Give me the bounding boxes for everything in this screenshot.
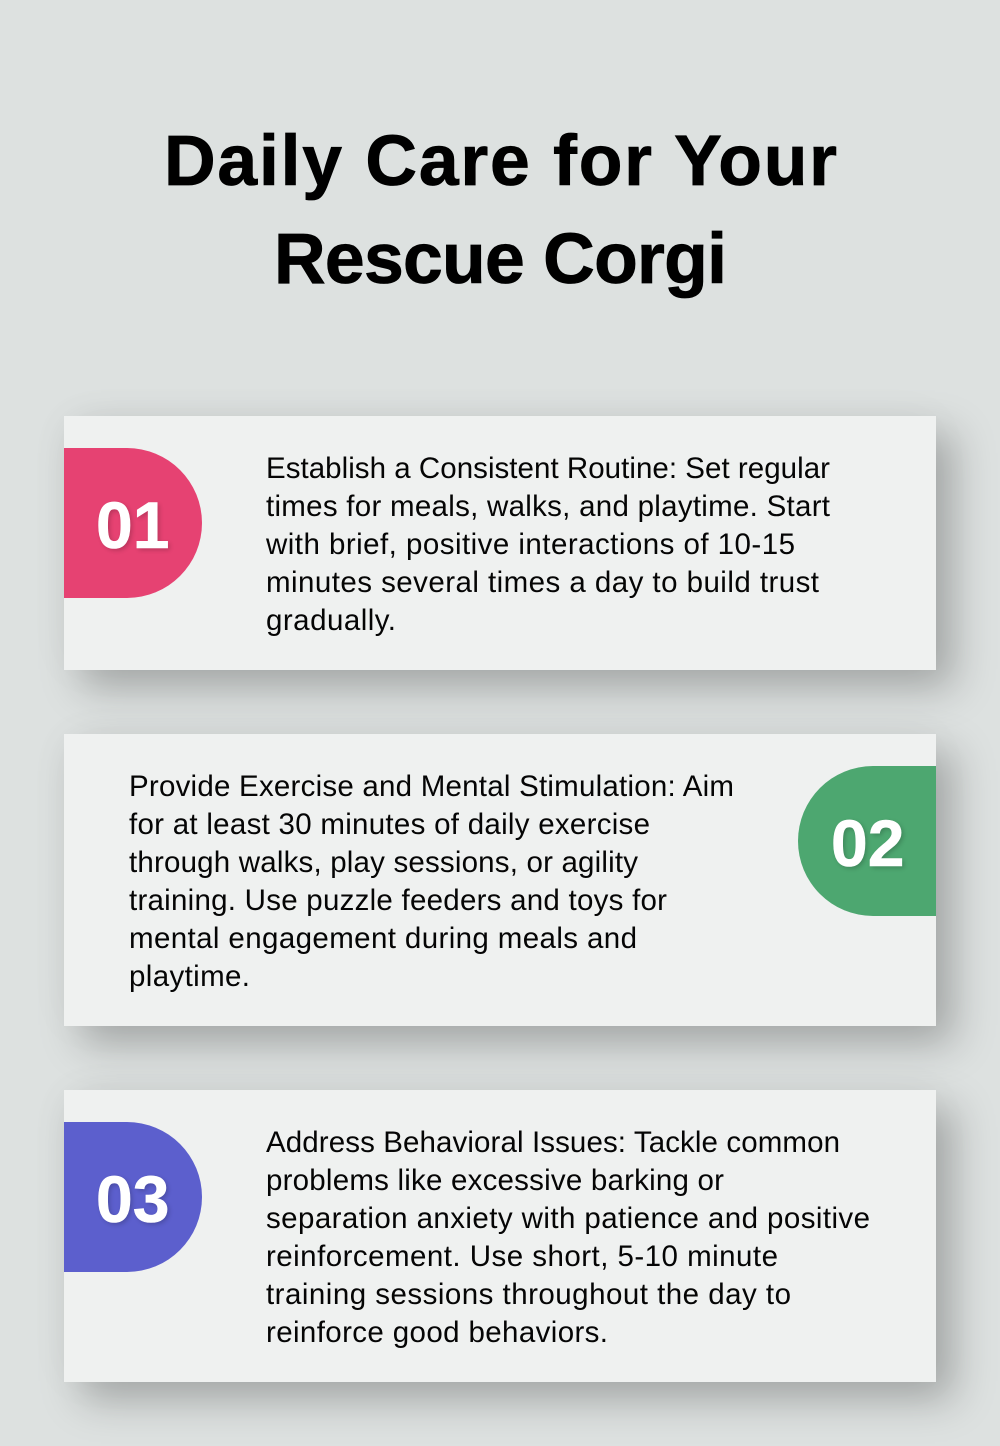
text block: step 2: through walks, play sessions, or agility [128, 846, 638, 879]
text block: step 2: for at least 30 minutes of daily exercise [128, 808, 650, 841]
text block: step 3: separation anxiety with patience and positive [266, 1202, 870, 1235]
text block: step 1: Establish a Consistent Routine: Set regular [266, 452, 830, 485]
panel: step 3 behavioral issues [64, 1090, 936, 1382]
text block: step 2: playtime. [128, 960, 250, 993]
text block: step 1: with brief, positive interactions of 10-15 [264, 528, 794, 561]
panel: step 1 consistent routine [64, 416, 936, 670]
title: Daily Care for Your [164, 121, 837, 201]
text block: step 1: minutes several times a day to build trust [266, 566, 818, 599]
badge: 03: 03 [96, 1162, 169, 1236]
badge: 03 [64, 1122, 202, 1272]
badge: 01: 01 [96, 488, 169, 562]
text block: step 3: reinforcement. Use short, 5-10 minute [266, 1240, 778, 1273]
text block: step 2 [128, 770, 734, 993]
text block: step 2: Provide Exercise and Mental Stimulation: Aim [128, 770, 734, 803]
badge: 01 [64, 448, 202, 598]
badge: 02 [798, 766, 936, 916]
text block: step 1: times for meals, walks, and playtime. Start [266, 490, 830, 523]
text block: step 3: Address Behavioral Issues: Tackle common [266, 1126, 840, 1159]
text block: step 1 [264, 452, 830, 637]
text block: step 3: training sessions throughout the day to [266, 1278, 790, 1311]
text block: step 3: problems like excessive barking or [266, 1164, 724, 1197]
badge: 02: 02 [831, 806, 904, 880]
title: Rescue Corgi [274, 219, 727, 299]
title [164, 121, 837, 299]
text block: step 2: mental engagement during meals and [128, 922, 636, 955]
text block: step 3: reinforce good behaviors. [266, 1316, 608, 1349]
text block: step 1: gradually. [266, 604, 396, 637]
panel: step 2 exercise and stimulation [64, 734, 936, 1026]
text block: step 3 [266, 1126, 870, 1349]
text block: step 2: training. Use puzzle feeders and toys for [128, 884, 667, 917]
